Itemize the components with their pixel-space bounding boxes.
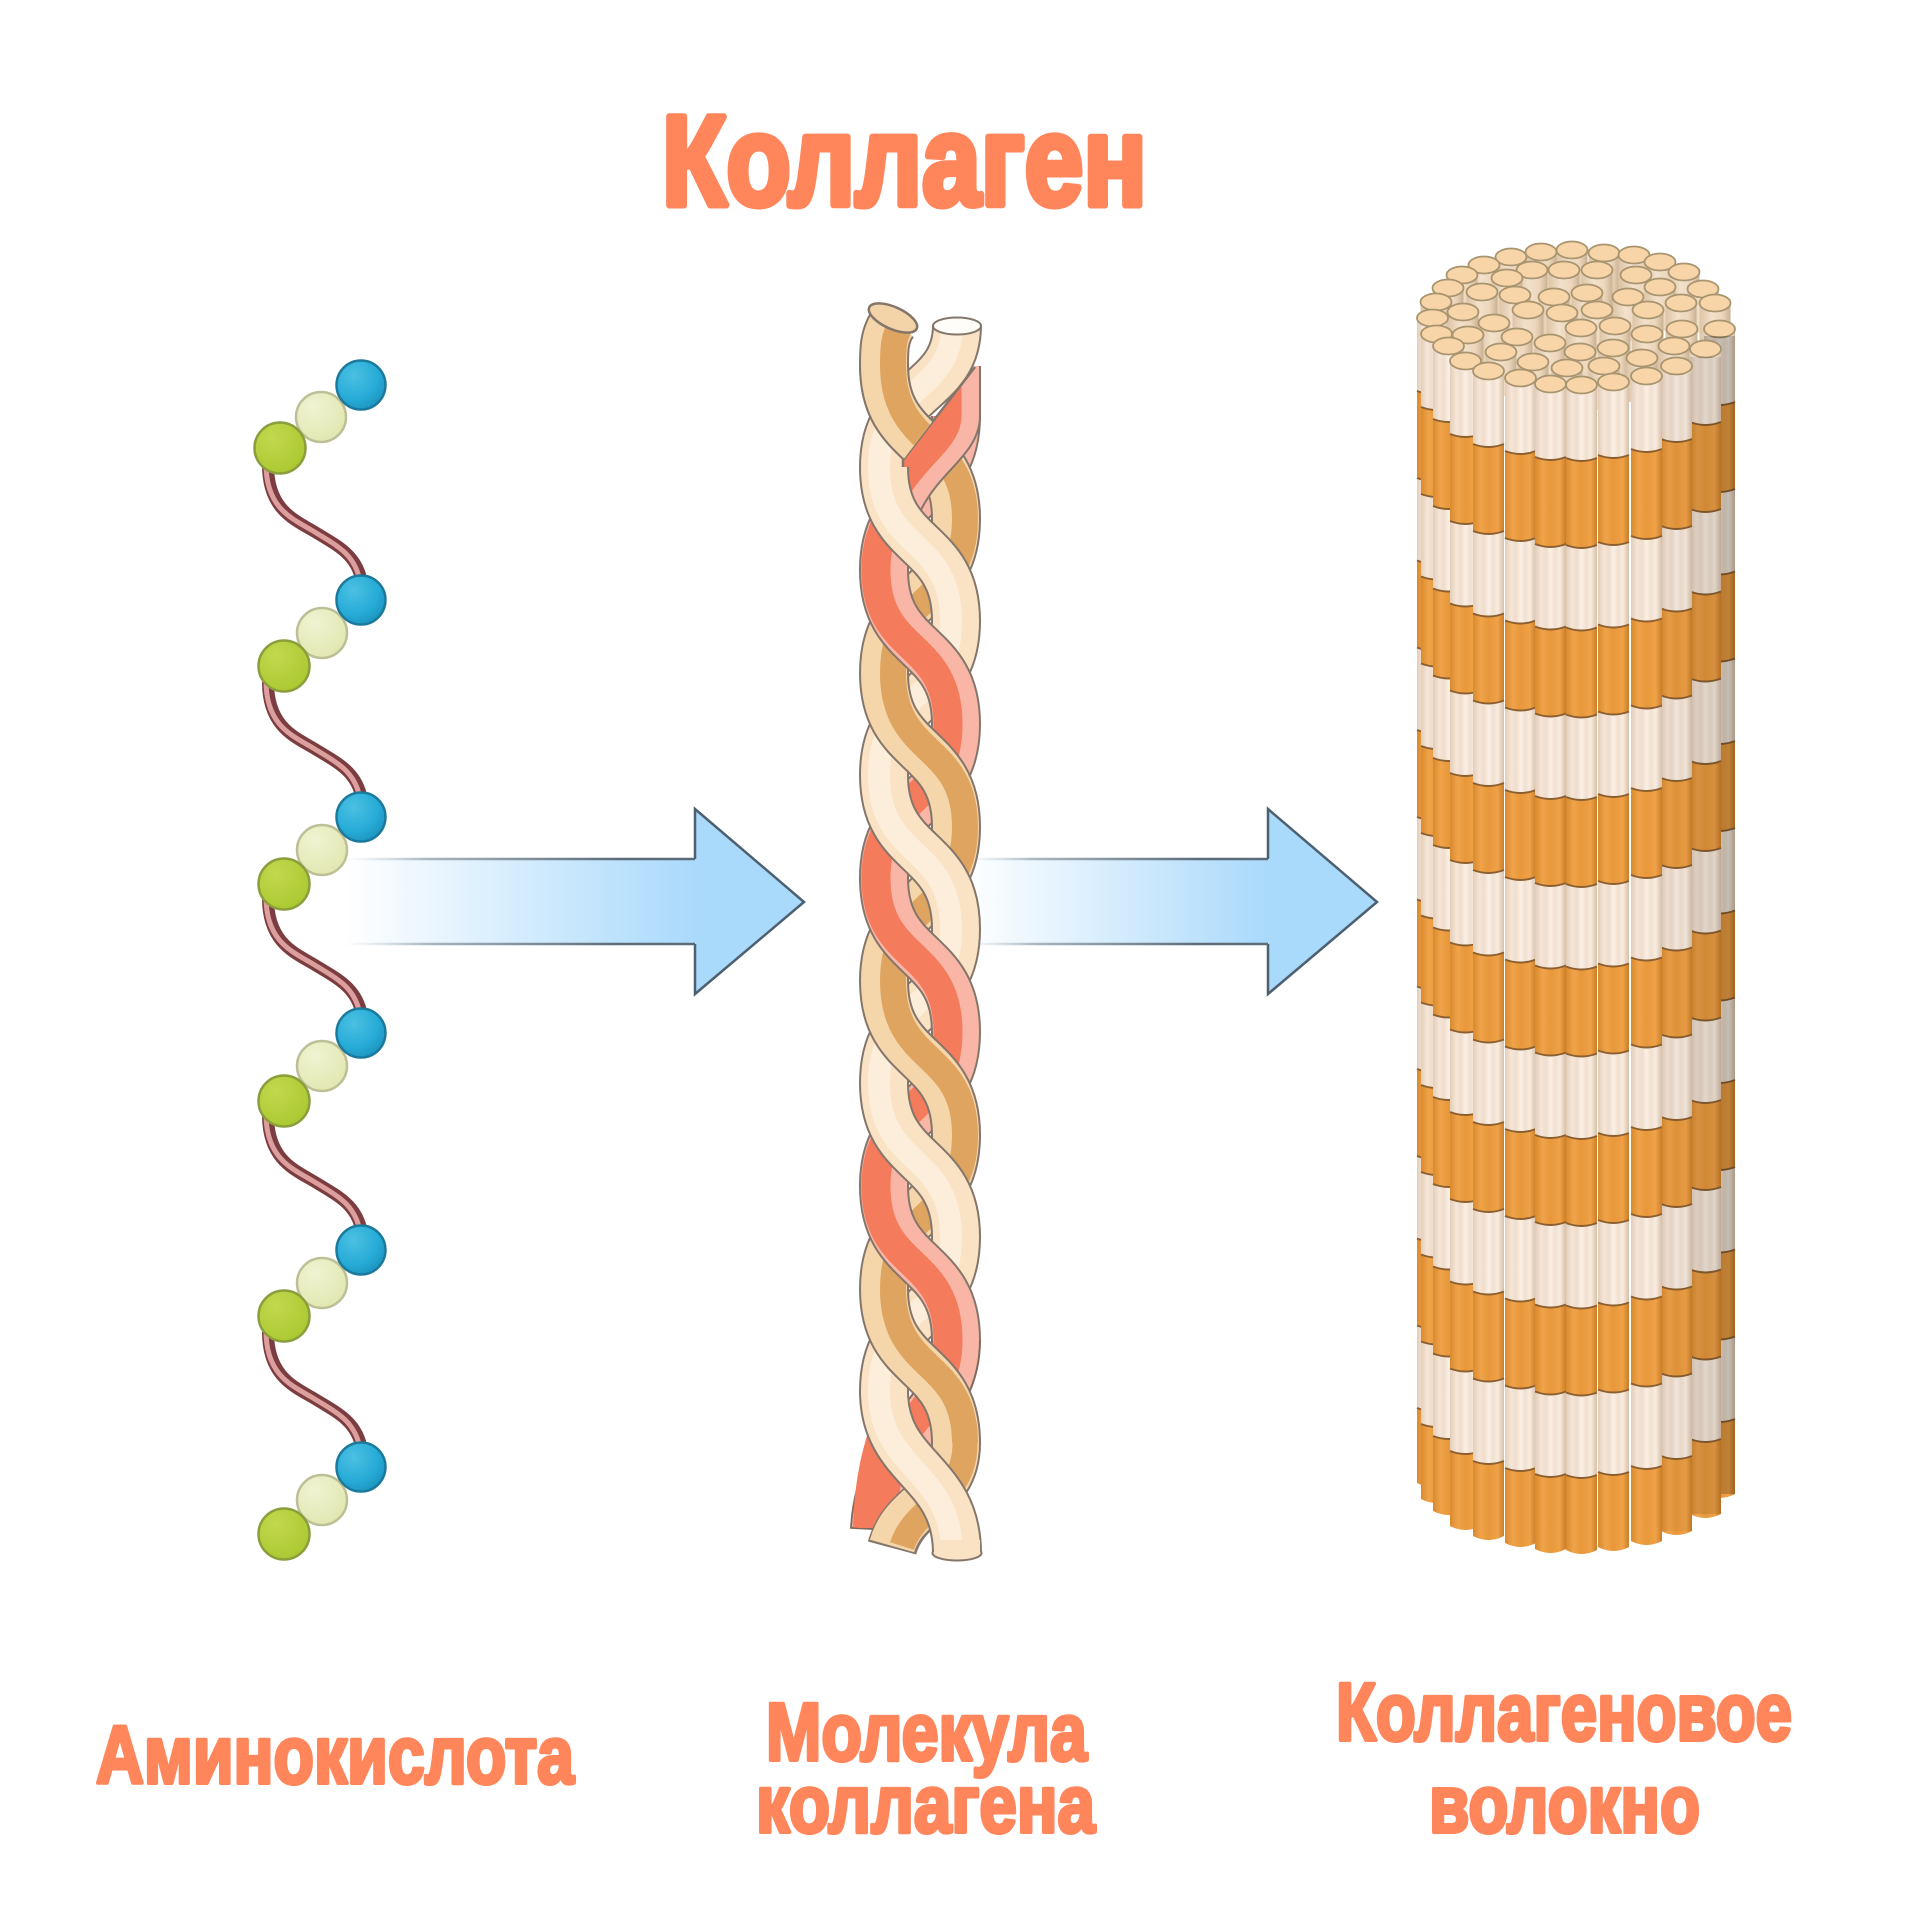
helix front segments xyxy=(876,467,982,1560)
arrow: collagen molecule to collagen fiber xyxy=(965,809,1377,994)
label: collagen fiber: волокно xyxy=(1429,1759,1700,1850)
helix rear segments xyxy=(872,318,981,1548)
tan strand cut end xyxy=(865,297,921,339)
blue beads xyxy=(336,360,386,1492)
collagen fiber bundle xyxy=(1417,242,1735,1554)
label: collagen molecule xyxy=(756,1687,1096,1850)
amino acid chain xyxy=(254,360,386,1560)
fiber banded rods xyxy=(1417,310,1735,1554)
peptide links xyxy=(266,464,361,1445)
tan strand top end xyxy=(884,322,965,519)
label: collagen molecule: коллагена xyxy=(756,1759,1096,1850)
collagen triple helix molecule xyxy=(865,297,982,1560)
green beads xyxy=(254,422,310,1560)
label: collagen molecule: Молекула xyxy=(766,1687,1088,1778)
arrow: amino acid to collagen molecule xyxy=(345,809,804,994)
red strand top segment xyxy=(902,366,981,510)
fiber top face rods xyxy=(1420,242,1730,412)
label: amino acid: Аминокислота xyxy=(96,1710,575,1801)
pale beads xyxy=(296,392,347,1525)
title: Коллаген xyxy=(662,90,1147,233)
tan strand crossing over cream xyxy=(859,366,932,460)
label: collagen fiber: Коллагеновое xyxy=(1336,1667,1792,1758)
label: collagen fiber xyxy=(1336,1667,1792,1850)
